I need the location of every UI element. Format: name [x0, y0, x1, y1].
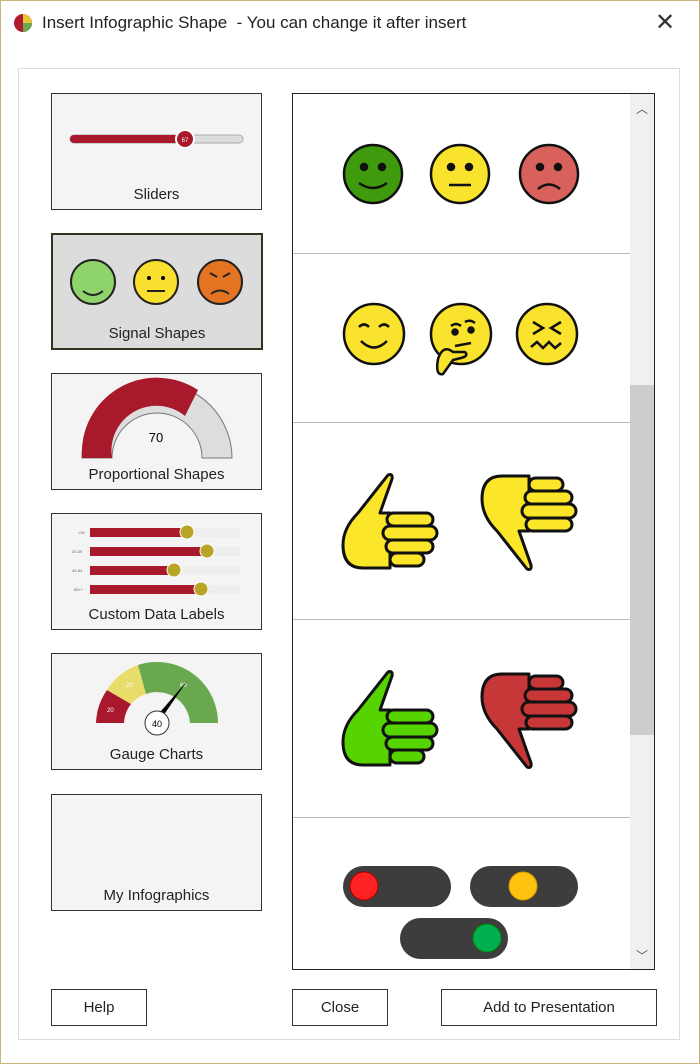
card: my infographics: My Infographics [104, 887, 209, 904]
card: sliders: Sliders [134, 186, 179, 203]
card: sliders [51, 93, 262, 210]
title text: Insert Infographic Shape - You can change it after insert [42, 13, 466, 32]
card: gauge charts: 20 [107, 708, 114, 714]
scrollbar: ︿ [636, 102, 648, 116]
card: custom data labels: <30 [78, 530, 86, 535]
card: proportional shapes: 70 [149, 430, 163, 445]
card: gauge charts [51, 653, 262, 770]
title bar [14, 9, 675, 36]
card: my infographics [51, 794, 262, 911]
card: gauge charts: Gauge Charts [110, 746, 203, 763]
card: proportional shapes: Proportional Shapes [89, 466, 224, 483]
button: add to presentation [441, 989, 657, 1026]
card: custom data labels [51, 513, 262, 630]
panel: shape list [292, 93, 655, 970]
card: custom data labels: 55++ [74, 587, 84, 592]
card: signal shapes [51, 233, 263, 350]
card: custom data labels: Custom Data Labels [89, 606, 224, 623]
row: green/red thumbs [343, 672, 437, 765]
row: yellow thumbs [343, 474, 437, 568]
button: help: Help [84, 999, 114, 1016]
button: close: Close [321, 999, 359, 1016]
scrollbar [630, 94, 654, 969]
button: add to presentation: Add to Presentation [483, 999, 615, 1016]
row: yellow emoji [344, 304, 577, 374]
card: proportional shapes [51, 373, 262, 490]
card: sliders: 67 [182, 138, 189, 144]
close icon: ✕ [655, 9, 675, 36]
card: signal shapes: Signal Shapes [109, 325, 205, 342]
card: gauge charts: 60 [180, 683, 187, 689]
card: custom data labels: 30-39 [72, 549, 83, 554]
card: gauge charts: 40 [152, 719, 162, 729]
row: toggle lights [343, 866, 578, 959]
button: help [51, 989, 147, 1026]
card: gauge charts: 20 [126, 683, 133, 689]
scrollbar: ﹀ [636, 949, 648, 963]
separators [293, 253, 630, 254]
button: close [292, 989, 388, 1026]
card: custom data labels: 40-54 [72, 568, 83, 573]
app icon [14, 14, 32, 32]
row: colored faces [344, 145, 578, 203]
